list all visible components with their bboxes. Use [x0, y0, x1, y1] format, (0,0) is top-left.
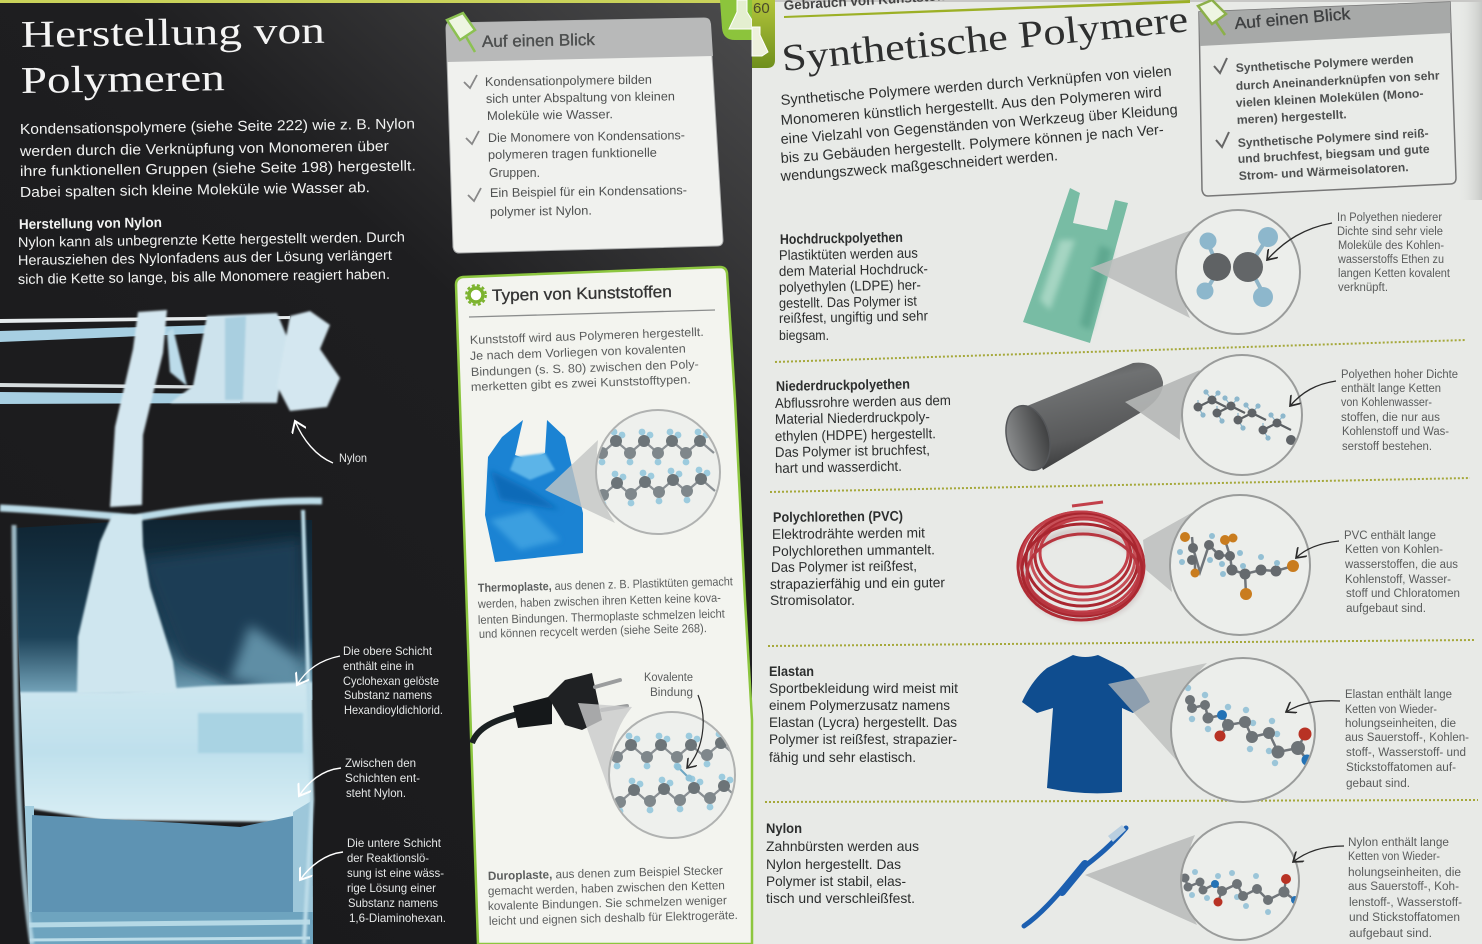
heading: Typen von Kunststoffen [492, 283, 672, 305]
callout: enthält lange Ketten [1341, 383, 1441, 395]
label: Nylon: Nylon [339, 451, 367, 465]
illustration: pipe [999, 363, 1163, 475]
callout: aufgebaut sind. [1346, 603, 1426, 615]
right page background [752, 0, 1482, 944]
text block: Nylon [766, 820, 802, 836]
checklist: durch Aneinanderknüpfen von sehr [1235, 68, 1440, 93]
label: lower layer: Die untere Schicht [347, 836, 442, 850]
text block: hart und wasserdicht. [775, 458, 902, 476]
callout: Moleküle des Kohlen- [1338, 240, 1444, 252]
label: middle layer: Zwischen den [345, 756, 416, 770]
callout: lenstoff-, Wasserstoff- [1349, 897, 1462, 909]
icon: push pin [447, 13, 475, 52]
text: Thermoplaste [477, 574, 734, 641]
label: upper layer: Die obere Schicht [343, 644, 433, 658]
text: Duroplaste: kovalente Bindungen. Sie schmelzen weniger [488, 893, 727, 913]
callout: Polyethen hoher Dichte [1341, 369, 1458, 381]
callout: Nylon enthält lange [1348, 837, 1449, 849]
text block: reißfest, ungiftig und sehr [779, 307, 928, 326]
callout [1290, 369, 1458, 453]
zoom cone: plug [578, 703, 632, 793]
text block: Sportbekleidung wird meist mit [769, 680, 958, 696]
checklist: meren) hergestellt. [1236, 107, 1347, 127]
label: upper layer: Substanz namens [344, 688, 432, 702]
text block: Plastiktüten werden aus [779, 245, 918, 263]
text: Duroplaste [488, 863, 738, 928]
callout: holungseinheiten, die [1348, 867, 1461, 879]
text block: Polymer ist stabil, elas- [766, 873, 906, 889]
intro text: right page: wendungszweck maßgeschneidert werden. [779, 148, 1059, 185]
zoom cone [1125, 370, 1200, 440]
callout: aus Sauerstoff-, Kohlen- [1345, 732, 1469, 744]
text block [775, 376, 951, 476]
photo: beaker with nylon thread [0, 310, 446, 944]
callout: Ketten von Wieder- [1348, 851, 1440, 863]
text block: Material Niederdruckpoly- [775, 408, 930, 427]
checklist: Die Monomere von Kondensations- [488, 128, 685, 145]
callout: aus Sauerstoff-, Koh- [1348, 881, 1459, 893]
label: lower layer: Substanz namens [348, 896, 438, 910]
text: Duroplaste: gemacht werden, haben zwischen den Ketten [488, 878, 725, 898]
intro text: Kondensationspolymere: ihre funktionellen Gruppen (siehe Seite 198) hergestellt. [20, 158, 416, 180]
circle: HDPE molecule [1182, 355, 1302, 475]
checklist: Strom- und Wärmeisolatoren. [1238, 160, 1409, 183]
text block [769, 663, 958, 765]
text block: Herstellung von Nylon: Nylon kann als unbegrenzte Kette hergestellt werden. Durch [18, 229, 405, 250]
title: Herstellung von Polymeren [21, 10, 325, 102]
circle: PVC molecule [1170, 495, 1310, 635]
callout: In Polyethen niederer [1337, 212, 1442, 224]
intro text: Kondensationspolymere: werden durch die Verknüpfung von Monomeren über [19, 139, 389, 160]
left page background [0, 0, 752, 944]
text block: einem Polymerzusatz namens [769, 697, 950, 713]
row: Polychlorethen (PVC) [770, 495, 1460, 635]
text block: dem Material Hochdruck- [779, 260, 928, 279]
text block: Herstellung von Nylon: sich die Kette so lange, bis alle Monomere reagiert haben. [18, 266, 390, 287]
callout: PVC enthält lange [1344, 530, 1436, 542]
beaker glass rim and walls [0, 501, 322, 944]
label: lower layer [300, 836, 446, 925]
checklist: Synthetische Polymere werden [1235, 52, 1414, 75]
section header: Gebrauch von Kunststoffen (cut off) [783, 0, 1190, 18]
text: Thermoplaste: Thermoplaste, aus denen z. B. Plastiktüten gemacht [478, 574, 734, 595]
label: middle layer: Schichten ent- [345, 771, 420, 785]
callout: stoff-, Wasserstoff- und [1346, 747, 1466, 759]
intro text: Kondensationspolymere: Kondensationspolymere (siehe Seite 222) wie z. B. Nylon [20, 116, 415, 138]
zoom cone [1143, 512, 1193, 592]
title: Herstellung von Polymeren: Herstellung von [21, 10, 325, 56]
callout: Dichte sind sehr viele [1337, 226, 1443, 238]
label: lower layer: rige Lösung einer [347, 881, 436, 895]
icon: gear [466, 285, 486, 305]
label: lower layer: sung ist eine wäss- [347, 866, 444, 880]
checklist: vielen kleinen Molekülen (Mono- [1235, 86, 1424, 110]
text block: Zahnbürsten werden aus [766, 838, 919, 854]
label: upper layer: Hexandioyldichlorid. [344, 703, 443, 717]
text block: Das Polymer ist bruchfest, [775, 441, 930, 460]
title: Synthetische Polymere: Synthetische Polymere [780, 0, 1190, 80]
tab: flask icon (left page) [720, 0, 752, 40]
panel: Auf einen Blick (right) [1198, 0, 1456, 196]
intro text: Kondensationspolymere: Dabei spalten sich kleine Moleküle wie Wasser ab. [20, 180, 370, 201]
intro text: right page: eine Vielzahl von Gegenständen von Werkzeug über Kleidung [780, 102, 1178, 148]
illustration: green bag [1023, 188, 1128, 343]
intro text: right page: Synthetische Polymere werden durch Verknüpfen von vielen [780, 64, 1172, 109]
text: Thermoplaste: lenten Bindungen. Thermoplaste schmelzen leicht [478, 607, 726, 627]
intro text: right page [779, 64, 1178, 185]
label: middle layer [299, 756, 420, 800]
text: Duroplaste: Duroplaste, aus denen zum Beispiel Stecker [488, 863, 723, 883]
circle: duroplast molecule [609, 712, 738, 838]
row: Hochdruckpolyethen [779, 188, 1451, 343]
nylon thread [77, 310, 340, 694]
callout: Ketten von Wieder- [1345, 704, 1437, 716]
checklist: Gruppen. [489, 166, 540, 180]
intro text: right page: Monomeren künstlich hergestellt. Aus den Polymeren wird [780, 84, 1162, 129]
glass rods [0, 316, 290, 404]
circle: elastan molecule [1171, 658, 1315, 802]
callout: holungseinheiten, die [1345, 718, 1456, 730]
row: Niederdruckpolyethen [775, 355, 1458, 476]
text block [770, 508, 945, 608]
label: lower layer: 1,6-Diaminohexan. [349, 911, 446, 925]
text block: gestellt. Das Polymer ist [779, 293, 917, 311]
callout: Ketten von Kohlen- [1345, 544, 1443, 556]
checklist: Synthetische Polymere sind reiß- [1237, 126, 1429, 150]
callout: verknüpft. [1338, 282, 1388, 294]
text block: Niederdruckpolyethen [776, 376, 910, 394]
checklist [464, 73, 687, 219]
text block: fähig und sehr elastisch. [769, 749, 916, 765]
intro text: Kunststoff wird aus Polymeren hergestellt. [470, 325, 704, 347]
heading: Auf einen Blick [482, 31, 596, 51]
callout: Stickstoffatomen auf- [1346, 762, 1456, 774]
illustration: toothbrush [1024, 825, 1126, 926]
text: Thermoplaste: und können recycelt werden (siehe Seite 268). [479, 621, 707, 641]
text block: Stromisolator. [770, 592, 855, 608]
intro text: right page: bis zu Gebäuden hergestellt. Polymere können je nach Ver- [780, 122, 1164, 167]
text block: polyethylen (LDPE) her- [779, 277, 921, 295]
callout: gebaut sind. [1346, 778, 1410, 790]
callout: wasserstoffen, die aus [1344, 559, 1458, 571]
text block [779, 229, 928, 343]
callout: stoffen, die nur aus [1341, 412, 1440, 424]
checklist: sich unter Abspaltung von kleinen [486, 89, 675, 106]
label: lower layer: der Reaktionslö- [347, 851, 429, 865]
label: Kovalente Bindung [644, 672, 703, 768]
checklist: polymer ist Nylon. [490, 204, 592, 219]
tab: page number and flask (right page): 60 [753, 0, 770, 17]
callout: serstoff bestehen. [1342, 441, 1432, 453]
tab: page number and flask (right page) [752, 0, 775, 68]
circle: nylon molecule [1180, 822, 1299, 940]
checklist: Ein Beispiel für ein Kondensations- [490, 183, 687, 200]
panel: Typen von Kunststoffen [456, 267, 752, 944]
beaker liquid layers [10, 520, 320, 944]
callout: stoff und Chloratomen [1346, 588, 1460, 600]
illustration: plug [472, 673, 627, 743]
text block: Hochdruckpolyethen [780, 229, 903, 247]
text block: Herstellung von Nylon: Herausziehen des Nylonfadens aus der Lösung verlängert [18, 247, 392, 268]
intro text: Kondensationspolymere [19, 116, 416, 201]
text block: Herstellung von Nylon: Herstellung von Nylon [19, 214, 162, 232]
text block: Abflussrohre werden aus dem [775, 392, 951, 411]
intro text: Bindungen (s. S. 80) zwischen den Poly- [471, 357, 699, 379]
text block: tisch und verschleißfest. [766, 890, 915, 906]
text block: Elektrodrähte werden mit [772, 524, 925, 542]
title: Herstellung von Polymeren: Polymeren [21, 57, 225, 102]
label: Kovalente Bindung: Kovalente [644, 672, 693, 684]
checklist: Moleküle wie Wasser. [487, 107, 613, 123]
zoom cone: bag [545, 440, 615, 523]
callout: von Kohlenwasser- [1341, 397, 1432, 409]
checklist: polymeren tragen funktionelle [488, 146, 657, 162]
callout [1267, 212, 1451, 294]
text block: ethylen (HDPE) hergestellt. [775, 425, 936, 444]
intro text [470, 325, 704, 394]
callout [1296, 530, 1460, 615]
zoom cone [1090, 228, 1197, 318]
zoom cone [1085, 835, 1197, 925]
callout: aufgebaut sind. [1349, 928, 1432, 940]
label: Nylon [295, 421, 367, 465]
text: Duroplaste: leicht und eignen sich deshalb für Elektrogeräte. [489, 908, 738, 928]
callout: Kohlenstoff, Wasser- [1345, 574, 1451, 586]
circle: thermoplast molecule [596, 410, 720, 534]
callout: und Stickstoffatomen [1349, 912, 1460, 924]
text block: biegsam. [779, 327, 829, 343]
text block: strapazierfähig und ein guter [770, 574, 945, 592]
callout: langen Ketten kovalent [1338, 268, 1451, 280]
zoom cone [1108, 663, 1207, 762]
label: upper layer: enthält eine in [343, 659, 414, 673]
text block: Polychlorethen ummantelt. [772, 541, 935, 559]
callout [1286, 689, 1469, 790]
text block: Polymer ist reißfest, strapazier- [769, 731, 957, 747]
callout [1293, 837, 1462, 940]
dotted dividers [765, 340, 1478, 802]
text block: Elastan [769, 663, 814, 679]
panel: Auf einen Blick (left) [446, 13, 723, 253]
circle: ethene molecule [1176, 210, 1300, 334]
intro text: merketten gibt es zwei Kunststofftypen. [471, 372, 691, 394]
checklist [1214, 52, 1440, 183]
icon: push pin [1198, 0, 1226, 35]
illustration: red wire coil [1018, 502, 1144, 620]
callout: Elastan enthält lange [1345, 689, 1452, 701]
text block: Elastan (Lycra) hergestellt. Das [769, 714, 957, 730]
row: Elastan [769, 655, 1469, 802]
text block: Polychlorethen (PVC) [773, 508, 903, 525]
callout: wasserstoffs Ethen zu [1337, 254, 1444, 266]
label: upper layer [297, 644, 443, 717]
checklist: und bruchfest, biegsam und gute [1237, 142, 1430, 166]
intro text: Je nach dem Vorliegen von kovalenten [470, 341, 686, 363]
illustration: blue t-shirt [1022, 655, 1150, 793]
label: Kovalente Bindung: Bindung [650, 687, 693, 699]
label: upper layer: Cyclohexan gelöste [343, 674, 439, 688]
text: Thermoplaste: werden, haben zwischen ihren Ketten keine kova- [477, 591, 721, 611]
callout: Kohlenstoff und Was- [1342, 426, 1449, 438]
text block: Das Polymer ist reißfest, [771, 557, 917, 575]
text block [766, 820, 919, 906]
row: Nylon [766, 820, 1462, 940]
heading: Auf einen Blick [1234, 5, 1352, 33]
checklist: Kondensationpolymere bilden [485, 73, 652, 89]
text block: Herstellung von Nylon [18, 214, 405, 287]
text block: Nylon hergestellt. Das [766, 856, 901, 872]
label: middle layer: steht Nylon. [346, 786, 406, 800]
illustration: blue bag [485, 420, 583, 562]
